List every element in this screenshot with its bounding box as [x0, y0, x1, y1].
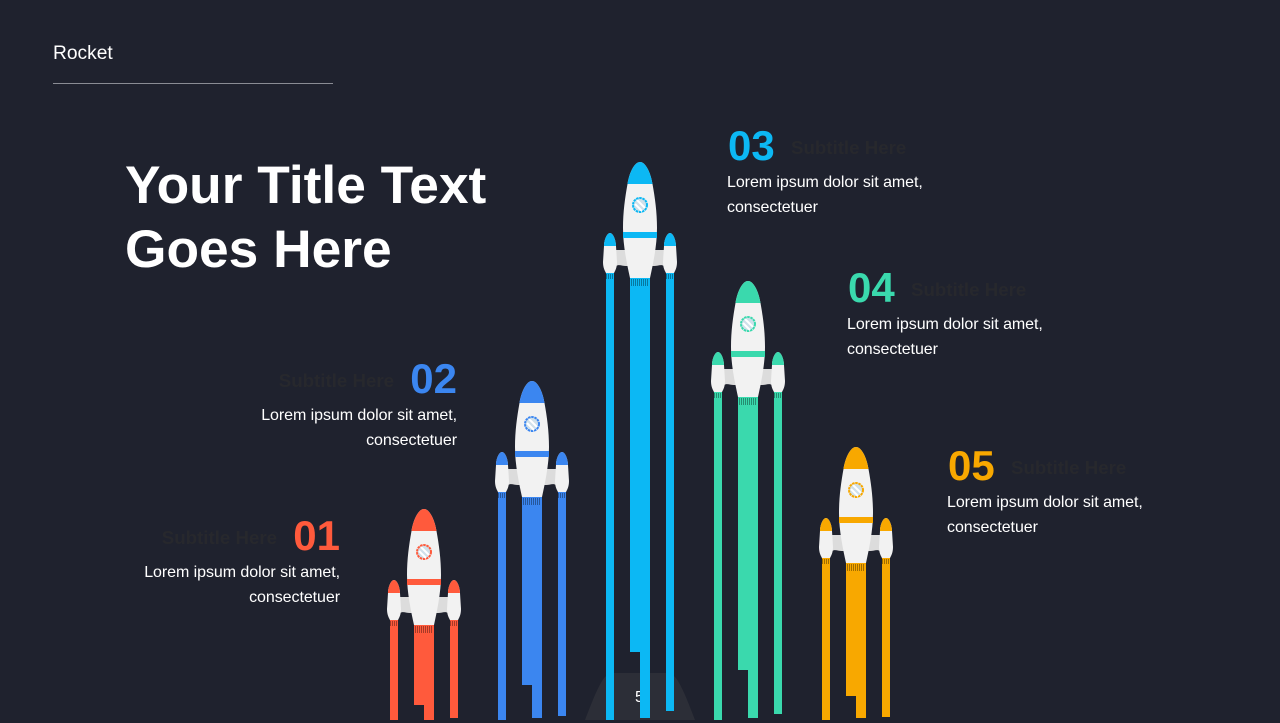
title: Your Title Text: [125, 156, 486, 215]
item 01: Lorem ipsum dolor sit amet,: [144, 564, 340, 581]
item 04: Lorem ipsum dolor sit amet,: [847, 316, 1043, 333]
item 01: [144, 512, 340, 606]
item 04: Subtitle Here: [911, 279, 1026, 300]
item 05: Subtitle Here: [1011, 457, 1126, 478]
item 01: 01: [293, 512, 340, 559]
item 02: [261, 355, 457, 449]
rocket 01: [387, 509, 461, 720]
item 05: [947, 442, 1143, 536]
item 01: consectetuer: [249, 589, 340, 606]
rocket 05: [819, 447, 893, 720]
title: [125, 156, 486, 279]
item 03: Lorem ipsum dolor sit amet,: [727, 174, 923, 191]
page number tab: [584, 673, 696, 720]
item 04: 04: [848, 264, 895, 311]
item 05: 05: [948, 442, 995, 489]
header rule: [53, 83, 333, 84]
item 01: Subtitle Here: [162, 527, 277, 548]
page number tab: 5: [635, 689, 644, 706]
item 03: [727, 122, 923, 216]
rocket 02: [495, 381, 569, 720]
item 02: 02: [410, 355, 457, 402]
item 05: consectetuer: [947, 519, 1038, 536]
item 02: Subtitle Here: [279, 370, 394, 391]
rockets graphic: [387, 162, 893, 720]
header label: Rocket: [53, 43, 113, 64]
item 04: [847, 264, 1043, 358]
rocket 03: [603, 162, 677, 720]
item 03: Subtitle Here: [791, 137, 906, 158]
title: Goes Here: [125, 220, 392, 279]
item 04: consectetuer: [847, 341, 938, 358]
item 03: consectetuer: [727, 199, 818, 216]
item 02: consectetuer: [366, 432, 457, 449]
item 02: Lorem ipsum dolor sit amet,: [261, 407, 457, 424]
item 03: 03: [728, 122, 775, 169]
rocket 04: [711, 281, 785, 720]
item 05: Lorem ipsum dolor sit amet,: [947, 494, 1143, 511]
